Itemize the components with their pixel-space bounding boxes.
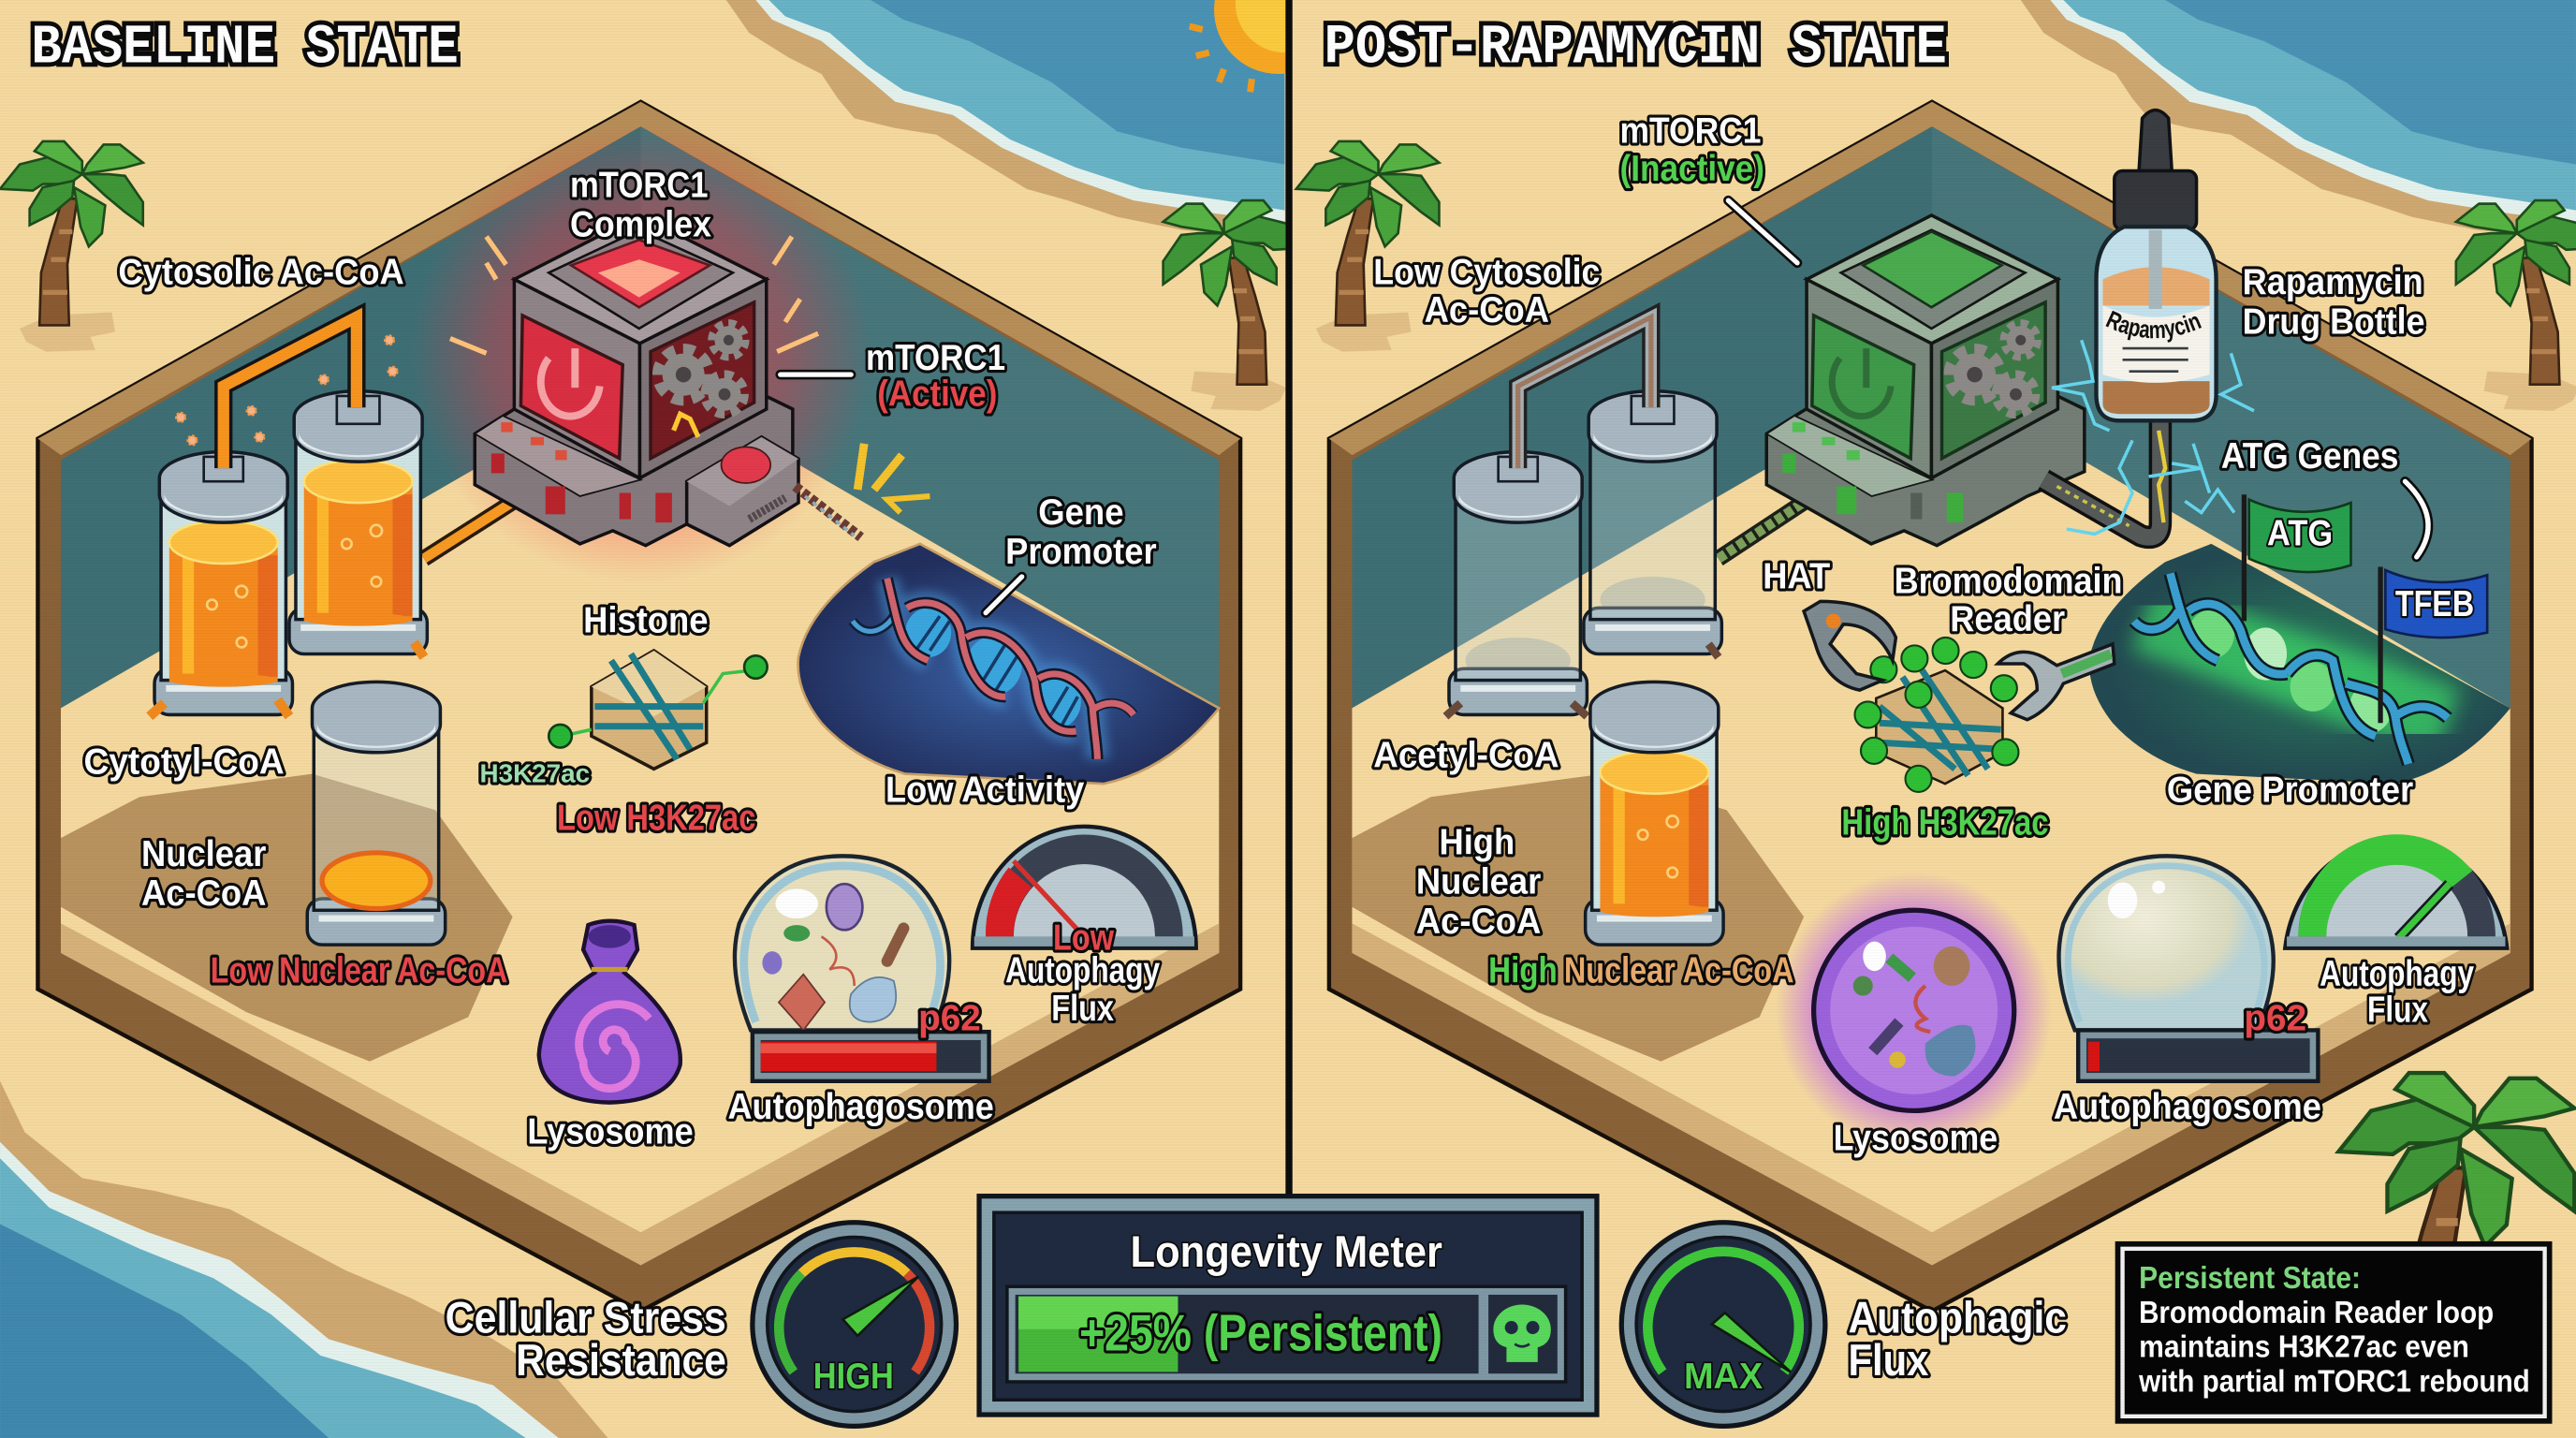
label: high nuclear Ac-CoA: High <box>1488 951 1558 991</box>
icon: sun <box>1189 0 1286 93</box>
grey connecting pipe <box>1499 317 1674 481</box>
icon: bromodomain reader wrench <box>1998 644 2115 720</box>
heading: baseline state: BASELINE STATE <box>31 16 459 80</box>
label: HAT: HAT <box>1763 556 1831 596</box>
label: mTORC1 complex: Complex <box>570 205 711 245</box>
hexagonal room <box>1329 102 2532 1312</box>
label: autophagosome: Autophagosome <box>728 1087 994 1127</box>
label: p62: p62 <box>918 998 981 1038</box>
gauge: autophagic flux max <box>1621 1223 1825 1426</box>
callout: persistent state: Bromodomain Reader loop <box>2139 1296 2494 1330</box>
label: mTORC1 complex <box>570 166 711 245</box>
label: high nuclear Ac-CoA: Nuclear Ac-CoA <box>1564 951 1794 991</box>
feed pipe to machine <box>1719 498 1810 559</box>
label: lysosome: Lysosome <box>1834 1119 1998 1159</box>
autophagy flux gauge high <box>2285 834 2507 948</box>
label: gene promoter: Gene <box>1038 492 1123 533</box>
icon: rapamycin drug bottle <box>2094 109 2218 423</box>
label: ATG genes <box>2221 436 2428 557</box>
meter bar <box>1007 1286 1566 1382</box>
gene promoter zone <box>798 544 1219 784</box>
icon: blue lightning <box>2052 340 2254 534</box>
label: cytosolic Ac-CoA: Cytosolic Ac-CoA <box>118 253 404 293</box>
icon: lysosome glowing <box>1776 873 2052 1149</box>
divider between panels <box>1285 0 1293 1195</box>
label: bromodomain reader: Reader <box>1950 599 2065 639</box>
label: mTORC1 active: (Active) <box>877 374 997 414</box>
meter bar: +25% (Persistent) <box>1079 1305 1442 1362</box>
label: mTORC1 active <box>781 338 1005 414</box>
icon: rapamycin drug bottle: Rapamycin <box>2106 311 2202 343</box>
gauge: autophagic flux max: MAX <box>1684 1357 1763 1397</box>
icon: ATG flag <box>2244 494 2351 621</box>
label: bromodomain reader <box>1895 562 2123 639</box>
label: high nuclear Ac-CoA stacked <box>1416 823 1541 942</box>
panel: longevity meter <box>979 1196 1597 1415</box>
label: autophagosome: Autophagosome <box>2054 1087 2321 1127</box>
icon: skull <box>1493 1304 1551 1362</box>
label: cellular stress resistance: Cellular Stress <box>446 1293 726 1343</box>
label: low autophagy flux <box>1005 917 1161 1029</box>
connecting pipe <box>176 317 397 481</box>
label: low H3K27ac: Low H3K27ac <box>557 798 755 838</box>
icon: TFEB flag <box>2380 566 2487 723</box>
p62 level bar <box>753 1032 989 1081</box>
label: low cytosolic Ac-CoA: Ac-CoA <box>1425 290 1549 330</box>
label: high nuclear Ac-CoA <box>1488 951 1794 991</box>
icon: autophagosome cleared <box>2058 856 2274 1030</box>
label: low cytosolic Ac-CoA <box>1373 253 1600 330</box>
label: autophagy flux: Autophagy <box>2320 954 2475 994</box>
label: autophagic flux: Autophagic <box>1848 1293 2067 1343</box>
icon: mTORC1 complex active <box>475 215 798 546</box>
icon: DNA helix low activity <box>853 579 1134 759</box>
mTORC1 glow <box>411 124 871 583</box>
label: nuclear Ac-CoA: Nuclear <box>141 834 266 874</box>
label: rapamycin drug bottle: Rapamycin <box>2243 262 2423 302</box>
label: low autophagy flux: Flux <box>1051 989 1114 1029</box>
label: gene promoter: Gene Promoter <box>2167 770 2413 810</box>
label: mTORC1 active: mTORC1 <box>866 338 1005 378</box>
label: autophagy flux: Flux <box>2367 990 2428 1031</box>
meter title: Longevity Meter <box>1131 1227 1442 1277</box>
callout: persistent state: maintains H3K27ac even <box>2139 1330 2469 1365</box>
icon: empty front tank <box>1445 452 1587 716</box>
labels: baseline <box>31 16 1161 1152</box>
label: cytotyl-CoA: Cytotyl-CoA <box>84 742 285 783</box>
icon: nuclear tank low <box>307 682 446 945</box>
icon: histone with bound readers <box>1854 638 2018 792</box>
label: autophagic flux <box>1848 1293 2067 1386</box>
callout: persistent state <box>2117 1244 2550 1421</box>
icon: ATG flag: ATG <box>2267 514 2333 554</box>
gauge: cellular stress resistance high <box>753 1223 956 1426</box>
icon: nuclear tank high <box>1586 682 1723 945</box>
label: bromodomain reader: Bromodomain <box>1895 562 2123 602</box>
label: autophagy flux <box>2320 954 2475 1031</box>
Ac-CoA outflow pipe <box>424 498 520 559</box>
label: rapamycin drug bottle: Drug Bottle <box>2243 301 2424 342</box>
autophagy flux gauge low <box>973 827 1196 948</box>
label: high nuclear Ac-CoA stacked: Ac-CoA <box>1416 902 1541 942</box>
icon: histone <box>549 651 768 769</box>
panel: baseline state <box>31 16 1240 1312</box>
label: H3K27ac: H3K27ac <box>480 758 590 787</box>
label: low autophagy flux: Autophagy <box>1005 951 1161 991</box>
label: low autophagy flux: Low <box>1053 917 1115 958</box>
label: mTORC1 inactive <box>1620 111 1797 263</box>
sparks and broken wires <box>450 237 929 537</box>
label: lysosome: Lysosome <box>527 1111 694 1152</box>
callout: persistent state: Persistent State: <box>2139 1261 2361 1296</box>
label: histone: Histone <box>583 601 708 641</box>
ocean: top of baseline panel <box>726 0 1284 240</box>
label: high nuclear Ac-CoA stacked: High <box>1439 823 1515 863</box>
ocean: top of post-rapamycin panel <box>2021 0 2576 240</box>
callout: persistent state: with partial mTORC1 rebound <box>2138 1365 2530 1400</box>
labels: post-rapamycin <box>1325 16 2475 1159</box>
icon: DNA helix with green glow <box>2134 574 2448 764</box>
gene promoter zone <box>2089 544 2510 784</box>
label: p62: p62 <box>2244 998 2306 1038</box>
label: low cytosolic Ac-CoA: Low Cytosolic <box>1373 253 1600 293</box>
label: rapamycin drug bottle <box>2243 262 2424 342</box>
label: nuclear Ac-CoA: Ac-CoA <box>141 873 266 914</box>
icon: lysosome bag <box>539 921 681 1103</box>
icon: front tank <box>150 452 292 716</box>
panel: post-rapamycin state <box>1324 16 2534 1311</box>
label: ATG genes: ATG Genes <box>2221 436 2398 477</box>
icon: back tank <box>289 391 427 657</box>
label: high nuclear Ac-CoA stacked: Nuclear <box>1416 862 1541 902</box>
icon: mTORC1 complex inactive <box>1766 215 2085 546</box>
label: mTORC1 inactive: mTORC1 <box>1620 111 1761 152</box>
gauge: cellular stress resistance high: HIGH <box>813 1357 894 1397</box>
label: mTORC1 complex: mTORC1 <box>570 166 708 206</box>
label: low activity: Low Activity <box>886 770 1085 810</box>
label: acetyl-CoA: Acetyl-CoA <box>1373 736 1559 776</box>
heading: post-rapamycin state: POST-RAPAMYCIN STATE <box>1325 16 1947 80</box>
icon: empty back tank <box>1584 391 1721 657</box>
label: mTORC1 inactive: (Inactive) <box>1620 149 1764 189</box>
label: low nuclear Ac-CoA: Low Nuclear Ac-CoA <box>211 951 507 991</box>
icon: autophagosome with cargo <box>735 856 949 1030</box>
label: cellular stress resistance <box>446 1293 726 1386</box>
icon: rapamycin tube to machine <box>2043 419 2165 537</box>
label: nuclear Ac-CoA <box>141 834 266 914</box>
label: gene promoter <box>986 492 1157 613</box>
label: autophagic flux: Flux <box>1848 1336 1928 1386</box>
p62 level bar low <box>2078 1030 2318 1081</box>
icon: HAT clamp <box>1804 601 1895 690</box>
label: gene promoter: Promoter <box>1005 532 1157 572</box>
icon: TFEB flag: TFEB <box>2395 584 2474 624</box>
hexagonal room <box>37 102 1240 1312</box>
label: high H3K27ac: High H3K27ac <box>1841 803 2049 844</box>
ocean: bottom left corner <box>0 1081 607 1438</box>
label: cellular stress resistance: Resistance <box>516 1336 726 1386</box>
